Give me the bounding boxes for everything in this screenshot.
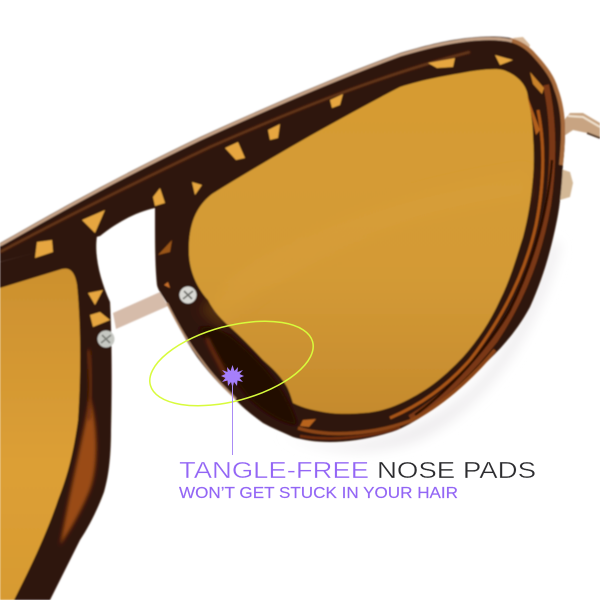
- left lens frame: [0, 236, 112, 600]
- tan edge, lower left of right frame: [167, 303, 236, 399]
- gold top bar: [0, 39, 512, 245]
- dark streak, right side: [415, 160, 552, 415]
- screw: left: [98, 330, 114, 348]
- left lens: [0, 269, 80, 600]
- right lens frame: [0, 36, 565, 442]
- tortoise spots: [35, 55, 544, 327]
- hinge: [557, 168, 573, 200]
- soft shadow under frame: [280, 240, 560, 451]
- subheading: WON’T GET STUCK IN YOUR HAIR: [179, 485, 458, 502]
- dark brown top streak: [0, 52, 470, 252]
- red-brown streak in nose pad: [207, 338, 228, 382]
- dark amber nose pad swirl: [200, 327, 296, 424]
- brown streak in left frame: [88, 350, 91, 420]
- lower left frame amber strip: [60, 398, 96, 545]
- lower rim reddish band: [300, 427, 400, 438]
- metal bridge bar: [113, 292, 168, 329]
- orange inner streak, right side: [390, 110, 543, 418]
- screw: right: [180, 286, 196, 304]
- tan outer rim, upper right: [510, 40, 563, 165]
- heading: TANGLE-FREE: [179, 457, 369, 483]
- amber streak, bottom rim: [298, 350, 495, 434]
- callout line: [232, 380, 234, 455]
- brown band, right side: [410, 85, 552, 418]
- icon: starburst: [221, 365, 244, 388]
- nose pad base highlight: [300, 419, 316, 427]
- highlight ellipse: [141, 306, 322, 421]
- lens reflection band: [210, 185, 530, 320]
- heading: NOSE PADS: [377, 457, 536, 483]
- corner rivet: [513, 37, 530, 53]
- right lens: [189, 69, 534, 414]
- temple arm: [564, 113, 600, 138]
- heading: [179, 457, 536, 483]
